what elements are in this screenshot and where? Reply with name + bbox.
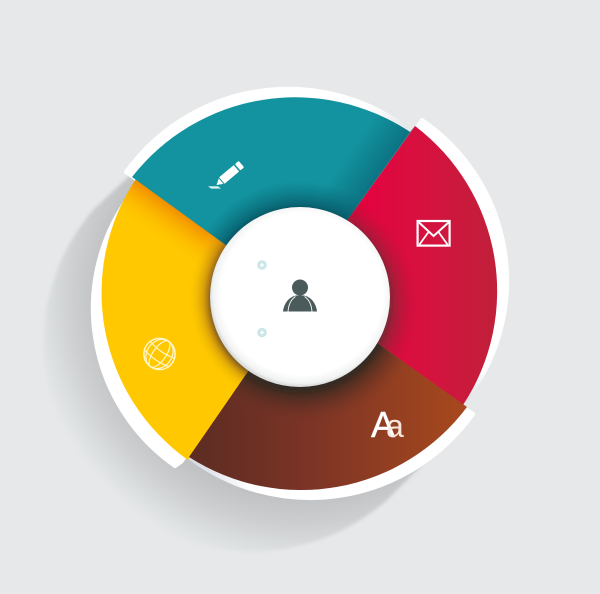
- band: teal: [126, 89, 406, 297]
- globe meridians: [138, 333, 181, 375]
- brown fill: [189, 297, 467, 490]
- teal inner shade: [132, 97, 410, 297]
- yellow inner shade: [102, 179, 300, 460]
- red fill: [300, 126, 497, 405]
- envelope flap: [418, 222, 449, 236]
- icon: Aa letters: A: [371, 404, 395, 445]
- center disc shadow: [209, 210, 389, 390]
- band: brown: [190, 297, 473, 498]
- teal right edge shade: [132, 97, 410, 297]
- long drop shadow: [43, 152, 445, 552]
- person body: [283, 296, 317, 312]
- yellow tip cover: [165, 440, 190, 466]
- yellow fill: [102, 179, 300, 460]
- teal fill: [132, 97, 415, 297]
- icon: plus dot top: [257, 260, 267, 270]
- brown inner shade: [189, 297, 467, 490]
- icon: plus dot bottom: [257, 328, 267, 337]
- pencil shape: [214, 161, 244, 188]
- icon: Aa letters: a: [386, 408, 404, 444]
- band: red: [300, 120, 507, 400]
- band: yellow: [93, 186, 300, 466]
- person shoulder lines: [288, 296, 312, 312]
- globe outline: [144, 338, 175, 370]
- center disc: [210, 207, 390, 387]
- icon: globe: [138, 333, 181, 375]
- pencil underline: [208, 186, 221, 189]
- white outer bands: [93, 89, 507, 498]
- panel: brown segment: [189, 297, 467, 490]
- person head: [292, 280, 308, 296]
- panel: red segment: [300, 126, 497, 405]
- envelope fold left: [420, 232, 428, 244]
- yellow top edge shade: [102, 179, 300, 460]
- icon: pencil: [208, 161, 244, 189]
- icon: envelope: [418, 221, 450, 246]
- icon: person: [283, 280, 317, 312]
- red inner shade: [300, 126, 497, 405]
- panel: teal segment: [132, 97, 415, 297]
- panel: yellow segment: [102, 179, 300, 460]
- envelope fold right: [438, 232, 448, 244]
- envelope frame: [418, 221, 450, 246]
